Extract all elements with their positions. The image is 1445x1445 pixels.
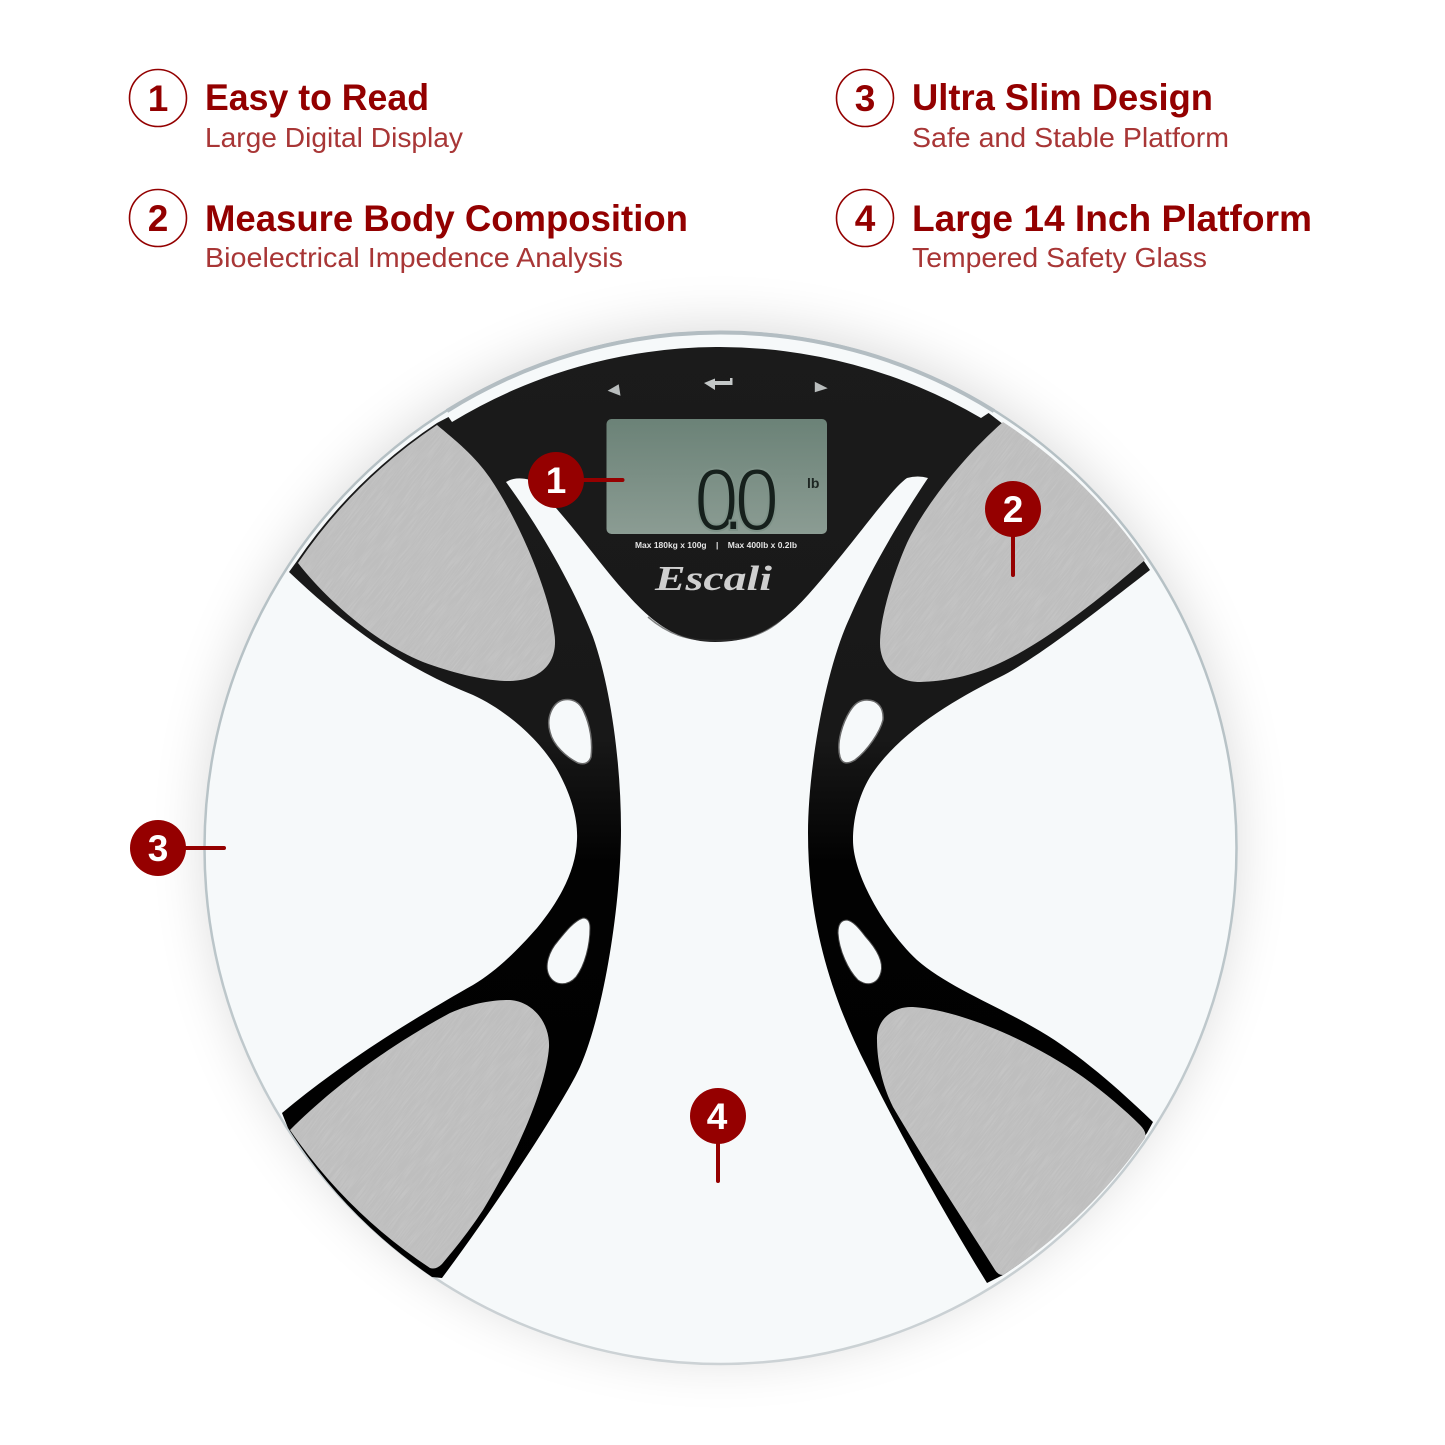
glass top edge highlight — [447, 333, 994, 411]
drop shadow — [210, 332, 1230, 1352]
callout 4 — [690, 1088, 746, 1181]
feature 3: ultra slim design: 3 — [855, 78, 875, 119]
frame hole: lower right — [838, 920, 882, 984]
feature 1: easy to read: 1 — [148, 78, 168, 119]
display pod rim — [648, 617, 781, 640]
black frame — [282, 347, 1153, 1283]
feature 4: large 14 inch platform: Large 14 Inch Platform — [912, 198, 1312, 239]
callout 1: 1 — [546, 460, 566, 501]
callout 2: 2 — [1003, 489, 1023, 530]
frame hole: upper right — [839, 700, 883, 763]
icon: left button — [608, 384, 620, 396]
LCD display — [606, 419, 827, 549]
feature 1: easy to read — [130, 70, 463, 153]
glass platform — [204, 332, 1236, 1364]
feature 1: easy to read: Large Digital Display — [205, 122, 463, 153]
callout 4: 4 — [707, 1096, 728, 1137]
frame hole: lower left — [547, 918, 590, 984]
callout 3 — [130, 820, 224, 876]
feature 3: ultra slim design: Safe and Stable Platform — [912, 122, 1229, 153]
feature 4: large 14 inch platform: Tempered Safety Glass — [912, 242, 1207, 273]
frame hole: upper left — [549, 700, 592, 764]
feature 2: measure body composition: Bioelectrical Impedence Analysis — [205, 242, 623, 273]
feature 2: measure body composition: 2 — [148, 198, 168, 239]
feature 3: ultra slim design — [836, 70, 1229, 153]
feature 4: large 14 inch platform — [836, 190, 1312, 273]
infographic — [128, 68, 1310, 1376]
feature 3: ultra slim design: Ultra Slim Design — [912, 77, 1213, 118]
brand logo: Escali — [654, 559, 772, 598]
feature 2: measure body composition: Measure Body Composition — [205, 198, 688, 239]
callout 1 — [528, 452, 622, 508]
feature 4: large 14 inch platform: 4 — [855, 198, 876, 239]
icon: right button — [815, 382, 828, 392]
capacity text: Max 180kg x 100g | Max 400lb x 0.2lb — [635, 541, 797, 550]
callout 3: 3 — [148, 828, 168, 869]
brushed steel foot pads — [290, 422, 1146, 1275]
callout 2 — [985, 481, 1041, 575]
feature 2: measure body composition — [130, 190, 688, 273]
unit: lb — [807, 475, 819, 491]
bathroom scale — [160, 293, 1273, 1400]
weight reading: 0.0 — [694, 450, 779, 549]
icon: enter button — [704, 378, 732, 390]
feature 1: easy to read: Easy to Read — [205, 77, 429, 118]
